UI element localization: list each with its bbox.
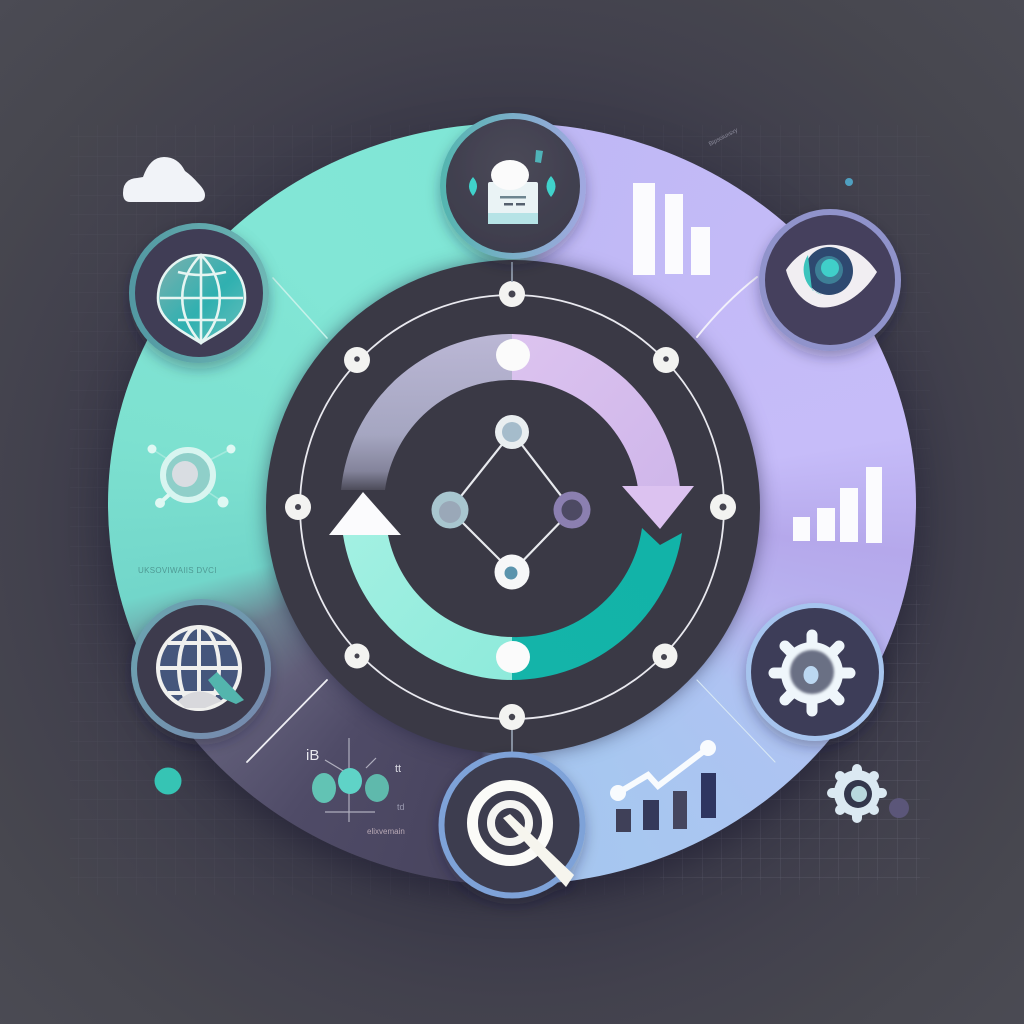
circular arrow cycle	[329, 334, 694, 680]
badge: person card	[443, 116, 583, 256]
panel: dark central hub	[266, 260, 760, 754]
badge: eye	[762, 212, 898, 348]
arc: dark teal lower right	[512, 528, 682, 680]
arc: lilac upper right	[512, 334, 680, 488]
badge: globe lower left	[134, 602, 268, 736]
icon: magnifier on teal	[148, 444, 236, 508]
panel: outer segmented ring	[108, 123, 916, 885]
node: top	[495, 415, 529, 449]
arrowhead: white up	[329, 492, 401, 535]
icon: globe	[158, 255, 245, 343]
diagram on dark segment with tiny labels	[306, 738, 405, 836]
arc: light teal lower left	[343, 535, 512, 680]
diagram on dark segment with tiny labels: td	[397, 802, 405, 812]
diagram on dark segment with tiny labels: tt	[395, 763, 401, 775]
orbit nodes	[285, 262, 736, 752]
node: right	[554, 492, 590, 528]
icon: gear	[774, 635, 850, 711]
diagram on dark segment with tiny labels: iB	[306, 747, 319, 764]
connector lines	[247, 277, 775, 762]
icon: small gear	[832, 769, 882, 818]
dot: muted purple	[889, 798, 909, 818]
marker: top of cycle	[496, 339, 530, 371]
icon: target with dart	[472, 786, 574, 887]
inner orbit ring line	[300, 295, 724, 719]
arc: grey upper left	[341, 334, 512, 490]
dot: small blue drop	[845, 178, 853, 186]
marker: bottom of cycle	[496, 641, 530, 673]
node: left	[432, 492, 468, 528]
arrowhead: lilac down	[622, 486, 694, 529]
icon: person with card	[469, 150, 556, 224]
bar chart: white bars on lavender right	[793, 467, 882, 543]
diagram on dark segment with tiny labels: elixvemain	[367, 827, 405, 836]
dot: teal	[154, 768, 182, 794]
icon: eye	[786, 245, 877, 308]
icon: globe with pin	[158, 627, 244, 709]
badge: gear	[746, 603, 884, 741]
bar chart: white bars on lavender top	[633, 183, 710, 275]
node: bottom	[494, 554, 530, 590]
line and bar chart on blue segment	[610, 740, 716, 832]
label: faint rotated text top right: Bipsoiuxsxy	[708, 128, 739, 148]
icon: cloud	[123, 157, 205, 202]
central diamond network	[432, 415, 590, 590]
badge: target	[442, 754, 582, 896]
label: faint text on teal segment: UKSOVIWAIIS DVCI	[138, 566, 217, 575]
badge: globe top left	[132, 226, 266, 360]
